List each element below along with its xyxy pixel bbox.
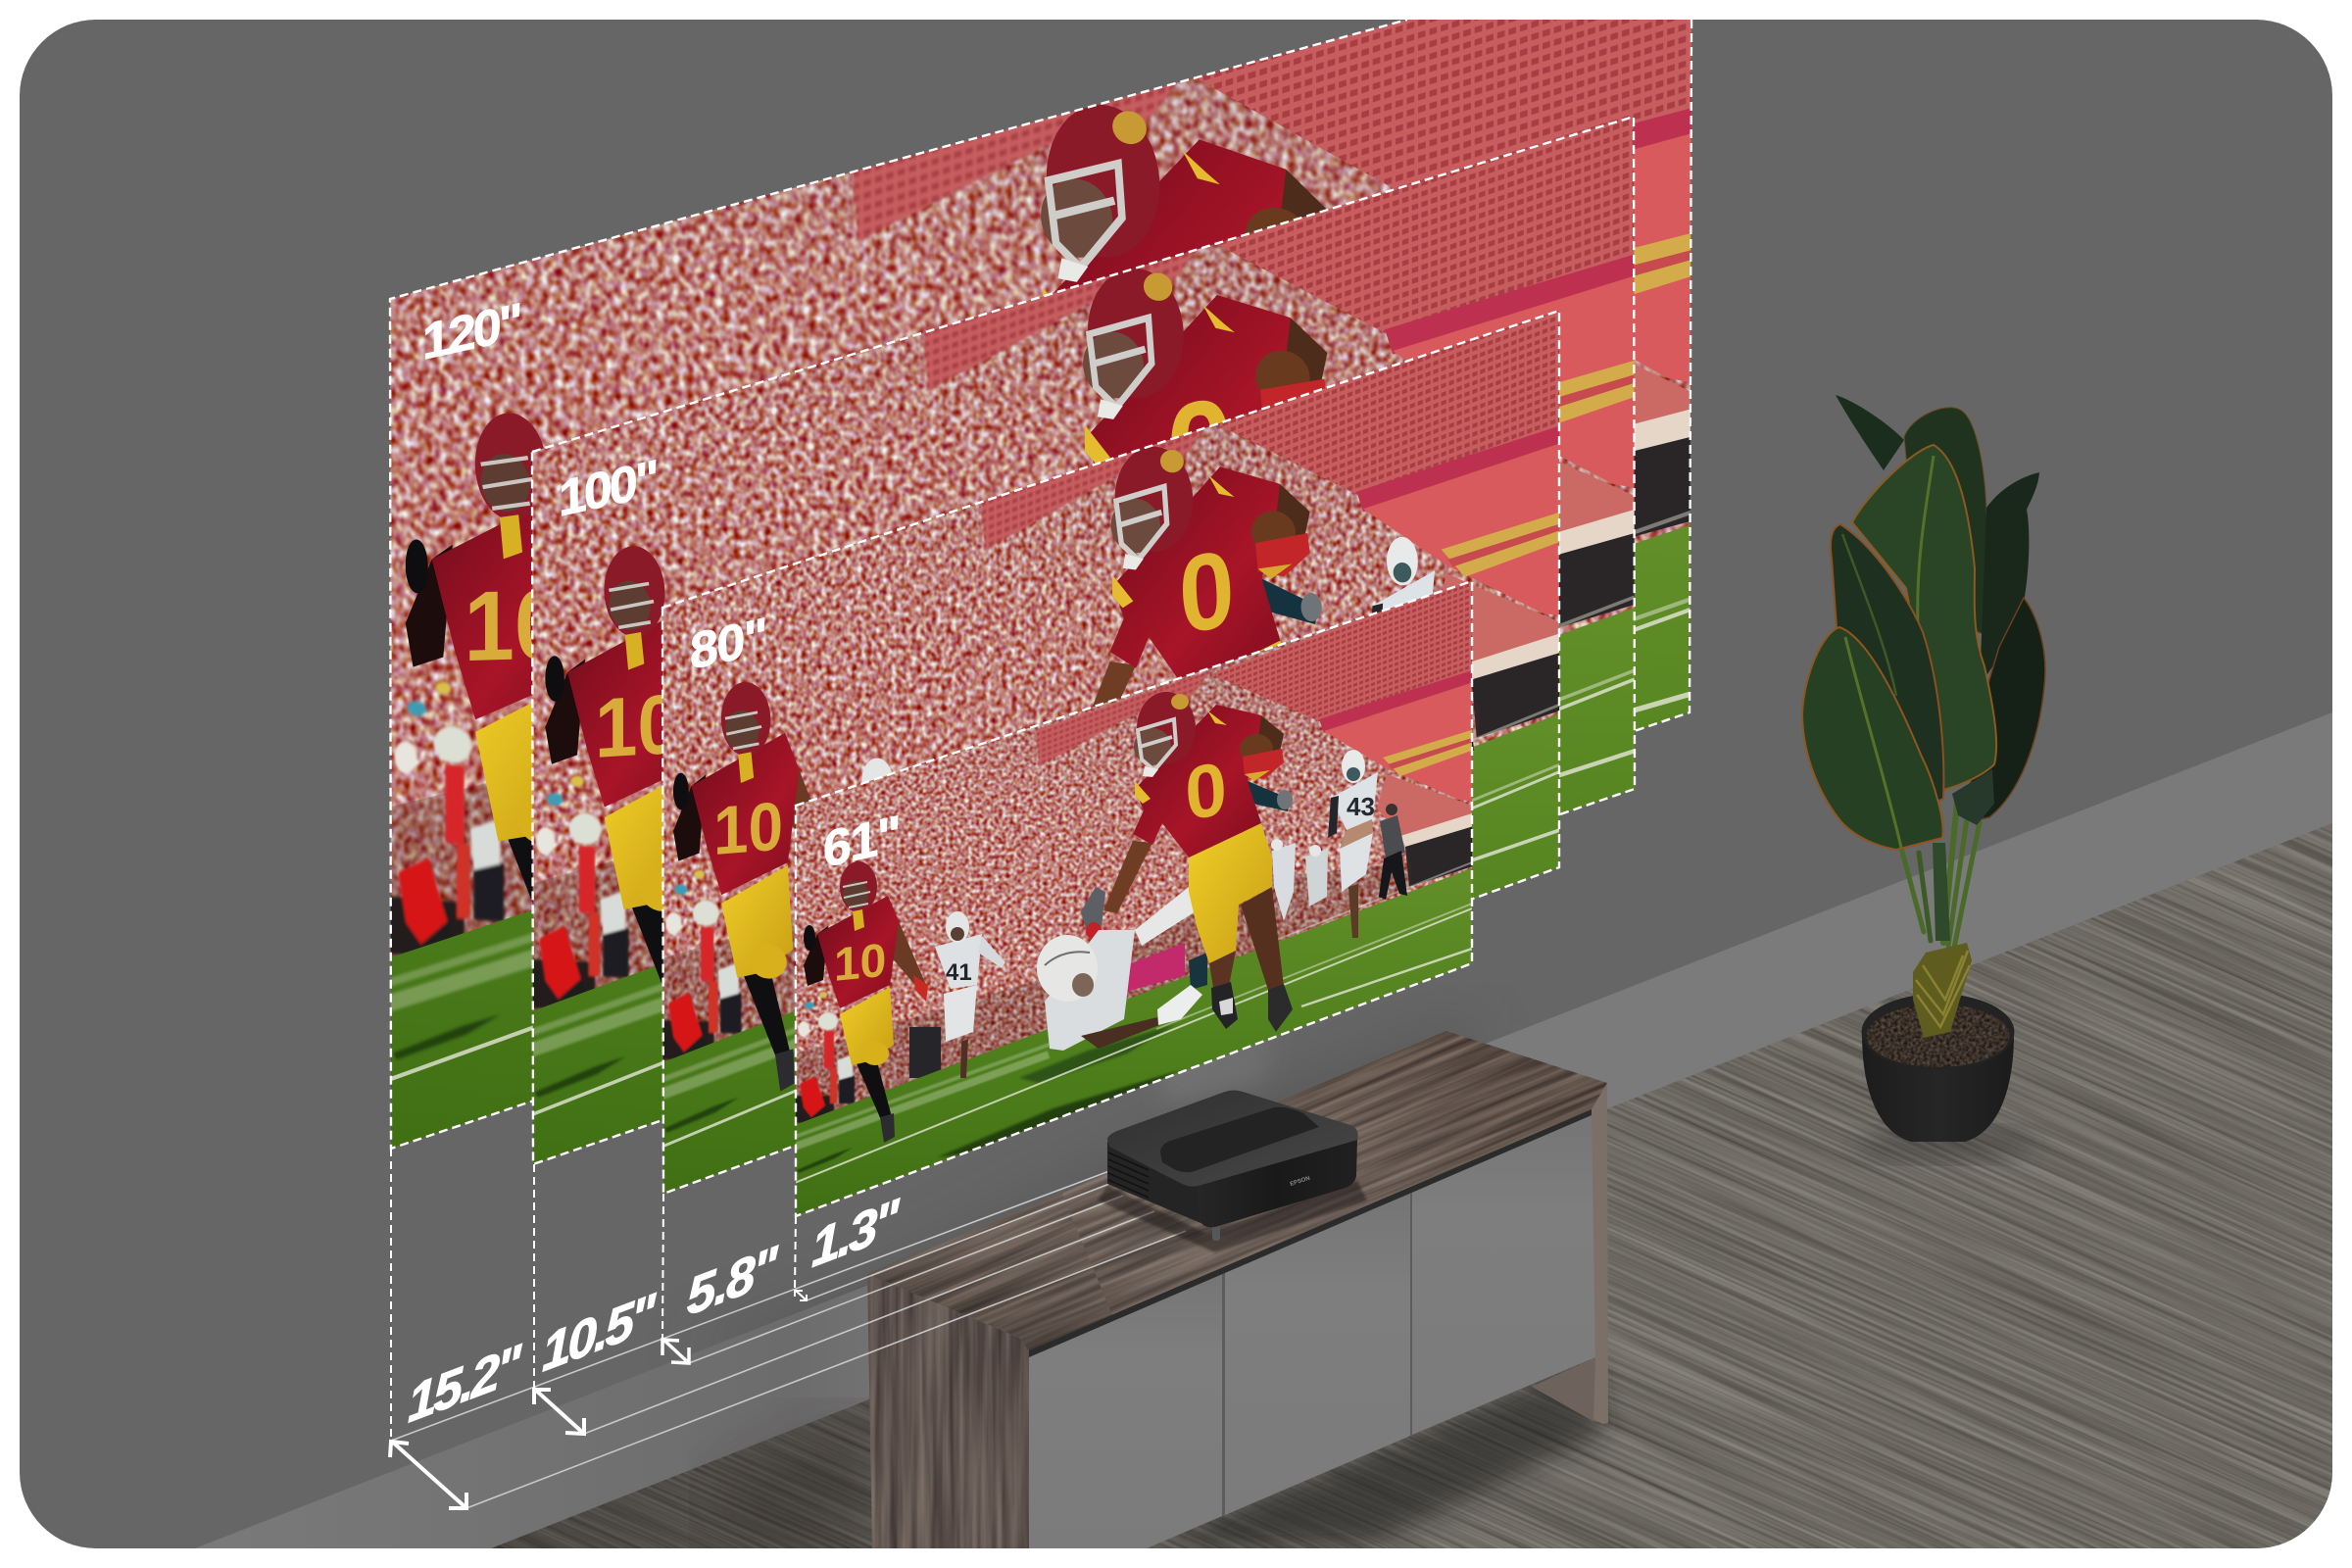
distance label 10.5: 10.5" — [542, 1281, 657, 1383]
plant pot — [1862, 1034, 2014, 1142]
screen: 80 inch — [620, 225, 1610, 1275]
screen: 61 inch — [764, 549, 1509, 1254]
distance label 5.8: 5.8" — [687, 1234, 779, 1327]
plant stem base — [1913, 943, 1972, 1038]
projector top — [1107, 1090, 1358, 1187]
cabinet right back panel — [1532, 1357, 1602, 1423]
plant — [1802, 395, 2045, 1142]
plant leaves — [1802, 395, 2045, 850]
projector side vents — [1107, 1142, 1205, 1225]
distance label 15.2: 15.2" — [408, 1332, 522, 1435]
plant pot shadow — [1857, 1127, 2034, 1162]
cabinet right leg — [1592, 1083, 1608, 1424]
cabinet left side — [867, 1274, 1029, 1548]
floor — [491, 823, 2332, 1548]
cabinet — [867, 1031, 1608, 1548]
floor shadow under cabinet — [1147, 1357, 1607, 1548]
size label 100: 100" — [559, 450, 656, 528]
screen: 100 inch — [480, 0, 1696, 1299]
guide lines to projector — [391, 1171, 1186, 1508]
wall shadow above cabinet — [1270, 1065, 1362, 1102]
floor shadow beside cabinet — [717, 1421, 872, 1548]
distance label 1.3: 1.3" — [811, 1187, 901, 1279]
size label 80: 80" — [690, 607, 766, 681]
projector — [1098, 1090, 1367, 1252]
cabinet edge shadow — [1029, 1109, 1592, 1357]
projector shadow — [1098, 1181, 1367, 1252]
distance arrow 1.3 — [795, 1290, 807, 1300]
screen: 120 inch — [329, 0, 1765, 1343]
distance arrow 15.2 — [390, 1441, 466, 1508]
distance arrow 10.5 — [534, 1389, 584, 1434]
size label 120: 120" — [422, 293, 519, 371]
projector foot — [1212, 1225, 1220, 1241]
projector front — [1198, 1140, 1357, 1227]
cabinet door backing — [1185, 1184, 1568, 1533]
size label 61: 61" — [823, 805, 900, 879]
projector lens window — [1160, 1107, 1319, 1172]
projector logo: EPSON — [1290, 1176, 1311, 1188]
projector light glow — [1127, 980, 1284, 1102]
plant soil — [1862, 1000, 2014, 1073]
baseboard — [195, 712, 2332, 1548]
plant stems — [1901, 803, 1980, 953]
cabinet doors — [1029, 1113, 1595, 1548]
drop lines from screens — [391, 1149, 796, 1441]
cabinet top — [867, 1031, 1607, 1350]
distance arrow 5.8 — [662, 1339, 689, 1363]
